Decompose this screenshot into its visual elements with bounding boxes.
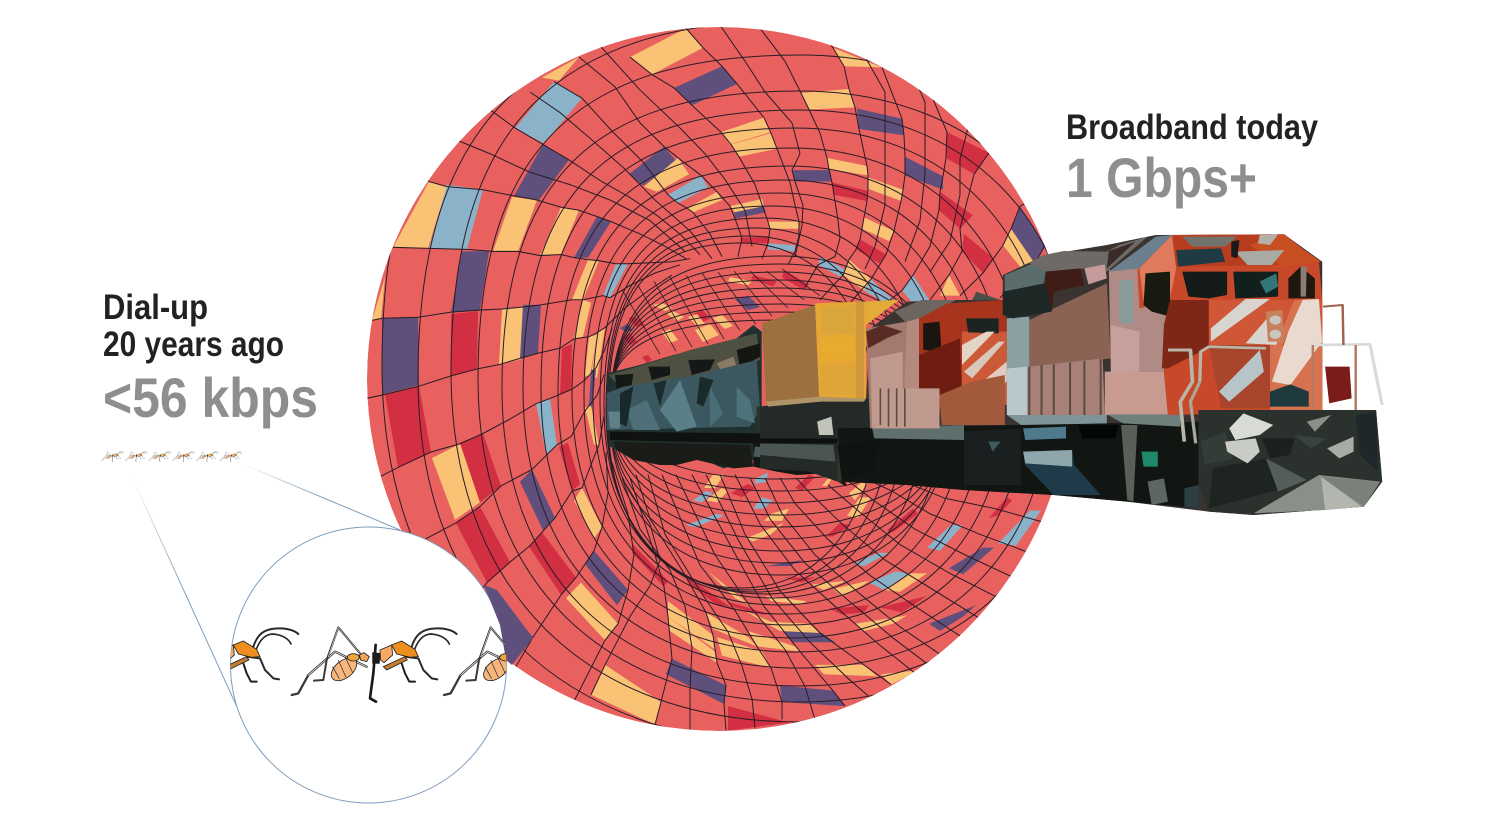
tunnel rings (382, 27, 1048, 727)
tunnel disc (367, 27, 1052, 731)
train: handrails (1168, 305, 1382, 443)
magnifier lens (230, 527, 506, 803)
coloured tunnel cells (372, 28, 1045, 731)
train: front plow (1199, 410, 1382, 515)
small cells beside the throat (620, 300, 758, 363)
purple cell visible beside lens (484, 585, 533, 665)
heading: Broadband today: Broadband today (1066, 108, 1318, 147)
heading: Dial-up 20 years ago: 20 years ago (103, 325, 284, 364)
train: yellow freight car (760, 300, 899, 482)
magnifier guide lines (132, 465, 400, 707)
magnifier callout (136, 467, 533, 804)
train (607, 234, 1382, 515)
value: under 56 kbps: <56 kbps (103, 366, 318, 429)
enlarged ants (230, 626, 506, 703)
heading: Dial-up 20 years ago: Dial-up (103, 288, 208, 327)
train: base silhouette (835, 234, 1382, 515)
heading: Dial-up 20 years ago (103, 288, 284, 364)
train: second locomotive (866, 292, 1009, 428)
tunnel spokes (366, 25, 1050, 731)
train: lower chassis (838, 422, 1199, 508)
train: tank cars (607, 325, 847, 487)
row of tiny ants (102, 452, 242, 462)
value: 1 Gbps+: 1 Gbps+ (1066, 146, 1257, 209)
train: lead locomotive cab (1137, 234, 1352, 415)
train: lead locomotive body (1003, 235, 1180, 427)
